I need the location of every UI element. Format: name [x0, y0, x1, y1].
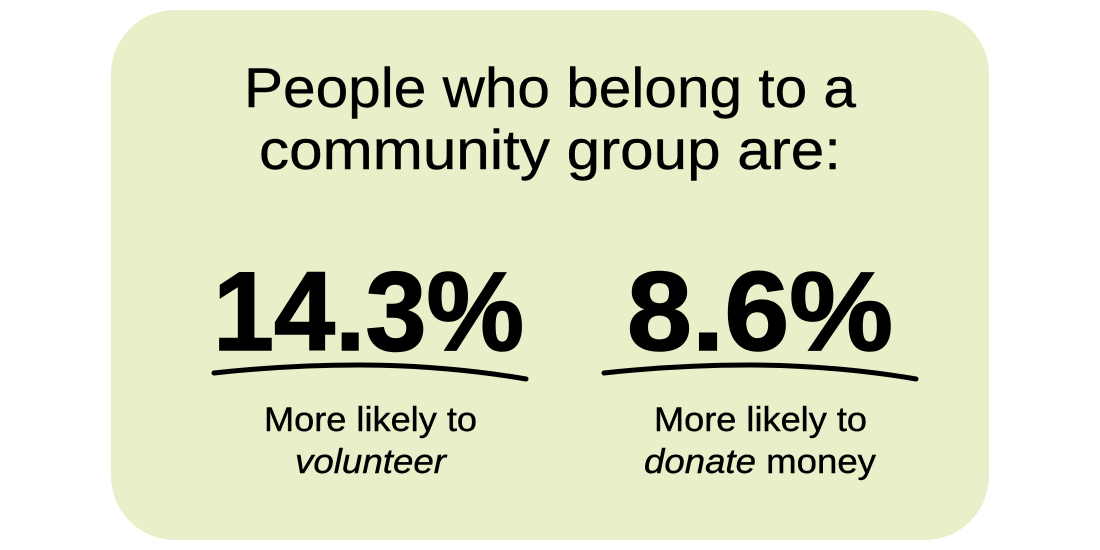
- stat: volunteer: [213, 249, 526, 481]
- heading: [244, 56, 857, 181]
- number: 8.6%: 8.6%: [627, 249, 893, 374]
- heading: People who belong to a: [244, 56, 857, 119]
- number: 14.3%: 14.3%: [213, 249, 524, 374]
- caption: volunteer: [295, 443, 448, 481]
- caption: More likely to: [264, 401, 477, 439]
- heading: community group are:: [259, 118, 841, 181]
- caption: [644, 401, 876, 481]
- underline: [604, 365, 916, 379]
- underline: [214, 365, 526, 379]
- panel: background card: [111, 10, 989, 540]
- caption: donate money: [644, 443, 876, 481]
- caption: [264, 401, 477, 481]
- stat: donate: [604, 249, 916, 481]
- caption: More likely to: [654, 401, 867, 439]
